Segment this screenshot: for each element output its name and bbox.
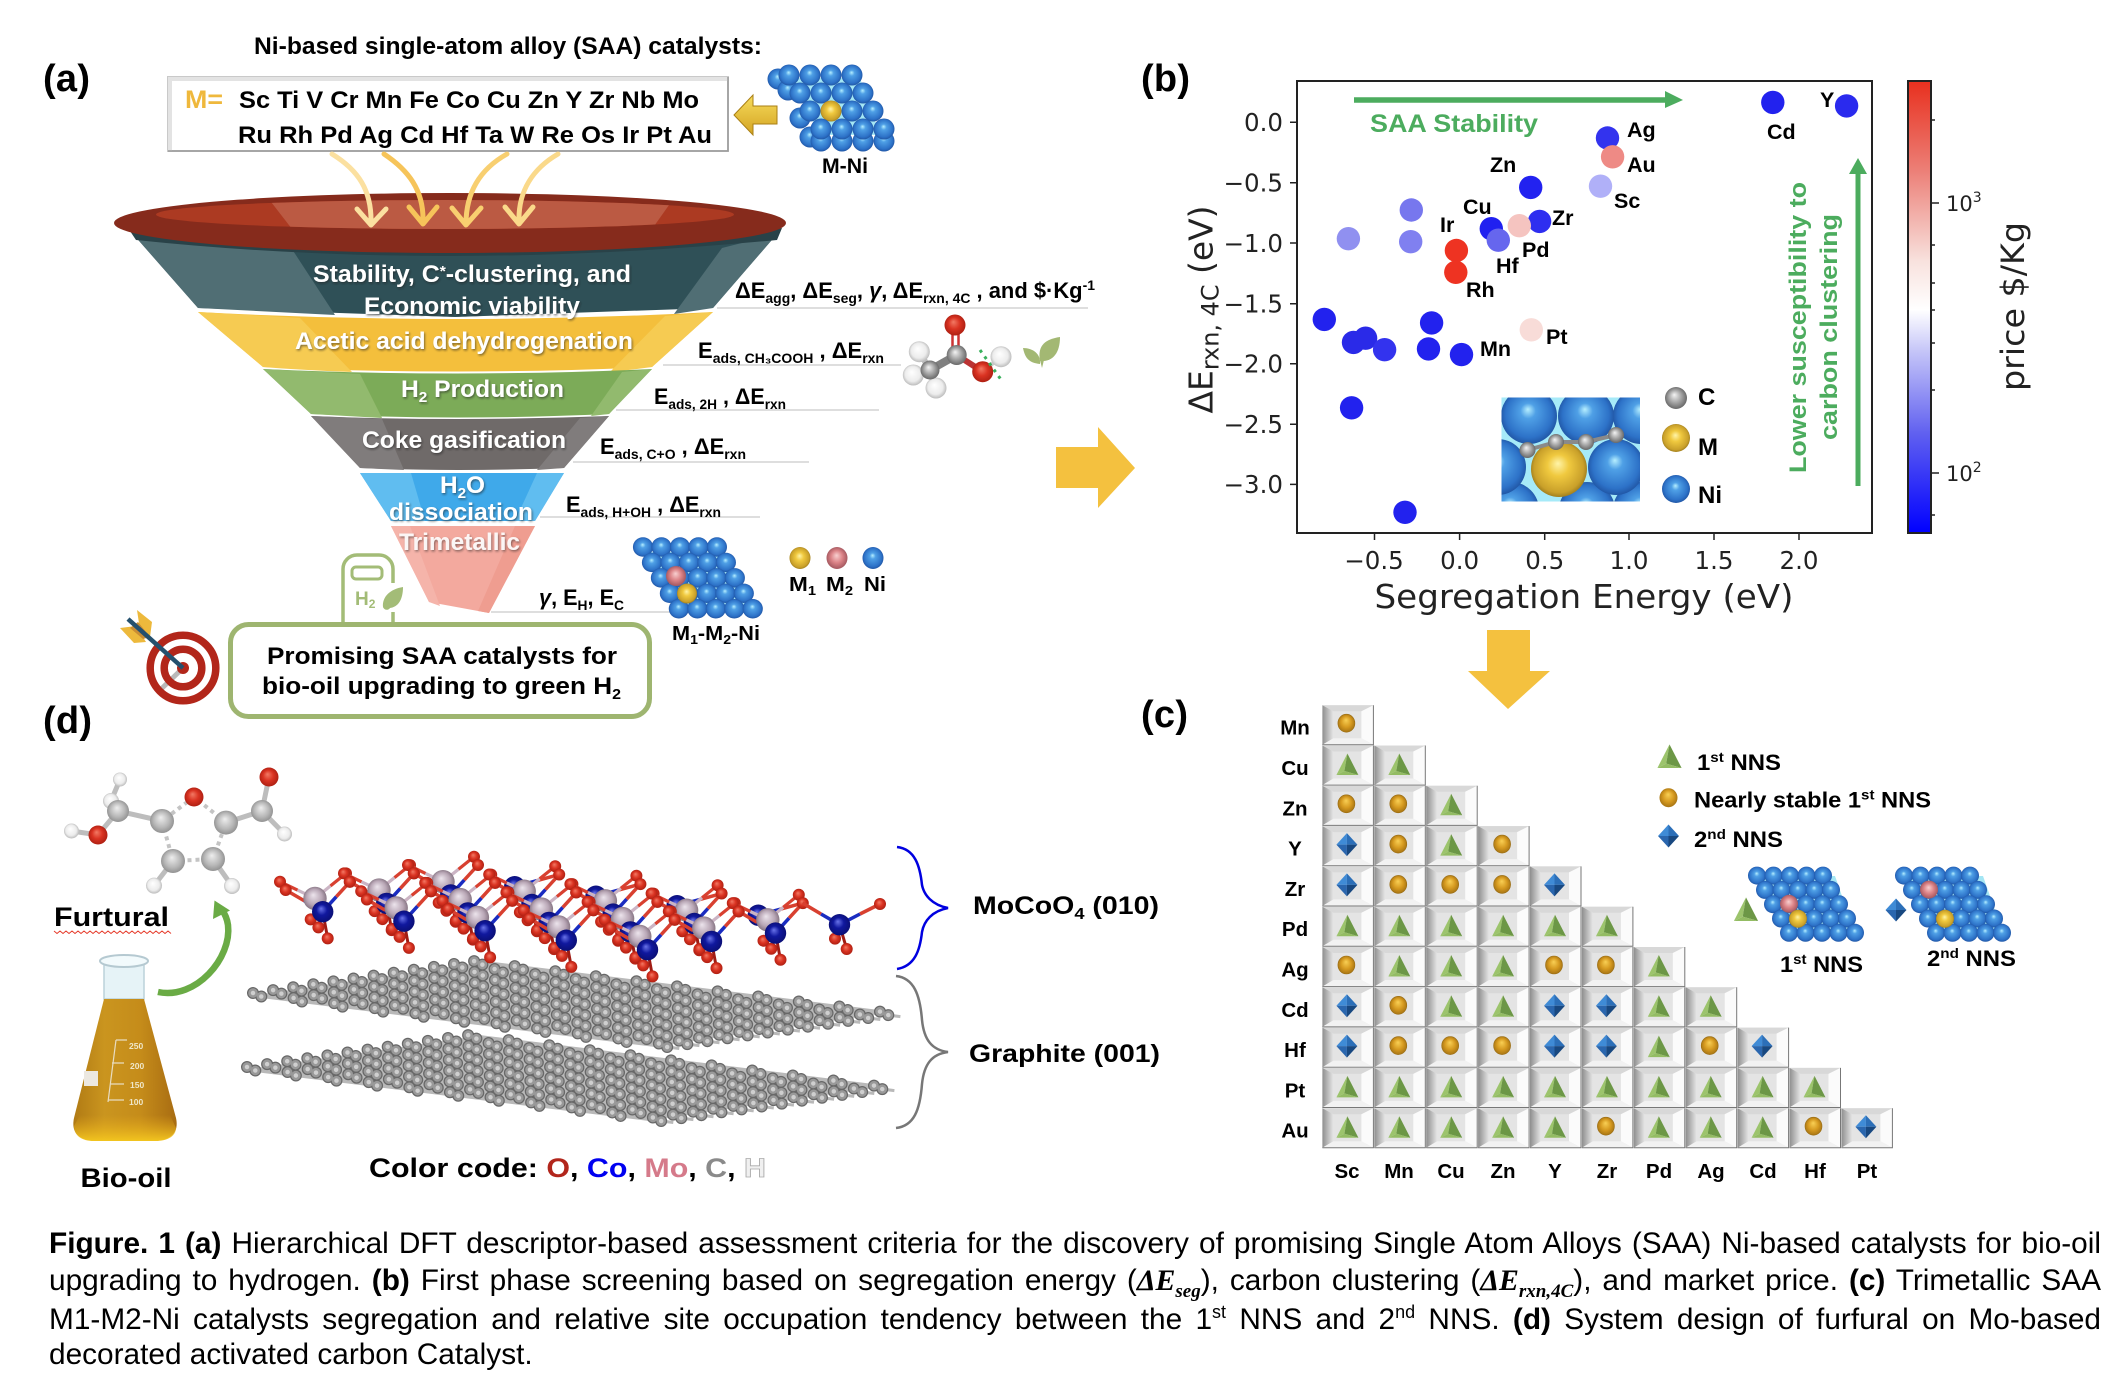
descriptors: tier 1: , ΔE: [790, 278, 833, 303]
legend: M1 M2 Ni: Ni: [864, 574, 886, 596]
scatter points: [1313, 91, 1858, 524]
inset legend: [1662, 384, 1722, 509]
descriptors: tier 5: rxn: [699, 504, 721, 520]
point labels: Zr: [1552, 206, 1574, 230]
x axis tick labels: 2.0: [1780, 546, 1818, 575]
column labels: Cd: [1749, 1160, 1777, 1183]
column labels: Zn: [1490, 1160, 1516, 1183]
label: M1-M2-Ni: -Ni: [731, 623, 760, 645]
brace: graphite: [896, 976, 948, 1128]
icon: bio-oil flask: [73, 955, 177, 1141]
arrow: lower susceptibility: [1785, 158, 1867, 486]
arrow: SAA stability: [1354, 91, 1683, 138]
descriptors: tier 4: , ΔE: [676, 434, 724, 459]
label: M1-M2-Ni: -M: [698, 623, 723, 645]
y axis tick labels: −2.0: [1224, 350, 1283, 378]
text: Figure. 1 (a) Hierarchical DFT descriptor-based assessment criteria for the discovery of promising Single Atom Alloys (SAA) Ni-based catalysts for bio-oil: [49, 1227, 2101, 1260]
example: 2nd NNS slab: 2: [1927, 946, 1939, 971]
descriptors: tier 4: ads, C+O: [615, 446, 676, 462]
label: Graphite (001): Graphite (001): [969, 1040, 1160, 1068]
legend: site types: NNS: [1726, 827, 1783, 852]
graphite sheet 1: [253, 961, 900, 1048]
funnel tier 4: coke gasification: Coke gasification: [362, 427, 566, 454]
point labels: Cd: [1767, 120, 1796, 144]
point labels: Sc: [1614, 189, 1640, 213]
arrow: SAA stability: SAA Stability: [1370, 110, 1538, 138]
descriptors: tier 1: agg: [765, 290, 790, 306]
colour bar: [1908, 81, 1982, 533]
descriptors: tier 5: , ΔE: [651, 492, 699, 517]
funnel tier 1: stability: -clustering, and: [446, 261, 631, 288]
example: 1st NNS slab: 1: [1780, 952, 1792, 977]
column labels: Sc: [1334, 1160, 1360, 1183]
colour bar: 3: [1973, 190, 1982, 206]
descriptors: tier 5: ads, H+OH: [581, 504, 651, 520]
panel a: hierarchical funnel: [114, 33, 1095, 716]
funnel tier 5: H2O dissociation: dissociation: [389, 499, 533, 526]
y axis tick labels: −2.5: [1224, 410, 1283, 439]
x axis tick labels: [1344, 546, 1818, 575]
icon: green H2 station: [343, 555, 403, 622]
label: M-Ni: M-Ni: [822, 155, 868, 178]
legend: M1 M2 Ni: 1: [808, 583, 816, 598]
callout: promising SAA catalysts: 2: [612, 686, 621, 703]
descriptors: tier 6: C: [614, 597, 624, 613]
label: M1-M2-Ni: M: [672, 623, 689, 645]
colour bar: 2: [1973, 460, 1982, 476]
inset legend: M: [1698, 434, 1718, 461]
row labels: Zn: [1282, 797, 1308, 820]
descriptors: tier 5: E: [566, 492, 581, 517]
label: M1-M2-Ni: 1: [690, 632, 698, 647]
legend: M1 M2 Ni: M: [789, 574, 806, 596]
funnel tier 1: stability: Stability, C: [313, 261, 435, 288]
row labels: Cd: [1281, 999, 1309, 1022]
point labels: Hf: [1496, 254, 1520, 278]
column labels: Pd: [1646, 1160, 1672, 1183]
text: upgrading to hydrogen. (b) First phase screening based on segregation energy (ΔEseg), carbon clustering (ΔErxn,4C), and market price. (c) Trimetallic SAA: [49, 1264, 2101, 1302]
descriptors: tier 1: [717, 277, 1095, 308]
figure caption: [49, 1227, 2101, 1371]
funnel tier 2: acetic acid: Acetic acid dehydrogenation: [295, 328, 633, 355]
descriptors: tier 5: [540, 492, 760, 520]
column labels: Mn: [1384, 1160, 1414, 1183]
example: 2nd NNS slab: NNS: [1959, 946, 2016, 971]
row labels: Cu: [1281, 757, 1309, 780]
descriptors: tier 2: ads, CH₃COOH: [713, 350, 813, 366]
descriptors: tier 2: [663, 338, 901, 366]
funnel tier 3: H2 production: H: [401, 376, 418, 403]
icon: acetic acid molecule: [903, 314, 1012, 398]
descriptors: tier 3: ads, 2H: [668, 396, 717, 412]
row labels: Hf: [1284, 1039, 1306, 1062]
icon: bio-oil flask: 200: [130, 1061, 144, 1071]
point labels: Cu: [1463, 195, 1492, 219]
row labels: Zr: [1285, 878, 1305, 901]
label: MoCoO4 (010): 4: [1074, 906, 1085, 923]
icon: bio-oil flask: 150: [130, 1080, 144, 1090]
legend: M1 M2 Ni: M: [826, 574, 843, 596]
legend: M1 M2 Ni: [789, 547, 886, 598]
column labels: Hf: [1804, 1160, 1826, 1183]
descriptors: tier 4: E: [600, 434, 615, 459]
inset legend: C: [1698, 384, 1715, 411]
icon: left arrow from M-Ni: [734, 95, 777, 135]
metal list box: Sc Ti V Cr Mn Fe Co Cu Zn Y Zr Nb Mo: [239, 87, 699, 114]
point labels: Zn: [1490, 153, 1516, 177]
callout: promising SAA catalysts: [230, 624, 650, 716]
colour bar: 10: [1946, 192, 1973, 216]
metal list box: Ru Rh Pd Ag Cd Hf Ta W Re Os Ir Pt Au: [238, 122, 712, 149]
panel label (c): (c): [1141, 694, 1188, 736]
panel label (b): (b): [1141, 58, 1190, 100]
row labels: Pd: [1282, 918, 1308, 941]
x axis title: Segregation Energy (eV): [1374, 577, 1794, 616]
graphite sheet 2: [247, 1035, 894, 1122]
funnel tier 3: H2 production: Production: [427, 376, 564, 403]
panel label (a): (a): [43, 58, 90, 100]
funnel tier 6: trimetallic: Trimetallic: [399, 529, 520, 556]
icon: bio-oil flask: 250: [129, 1041, 143, 1051]
descriptors: tier 4: rxn: [724, 446, 746, 462]
panel d: system design: [54, 768, 1160, 1193]
heading: SAA catalysts: Ni-based single-atom alloy (SAA) catalysts:: [254, 33, 762, 60]
legend: site types: st: [1710, 749, 1724, 765]
descriptors: tier 3: E: [654, 384, 669, 409]
icon: green H2 station: 2: [369, 597, 376, 611]
label: MoCoO4 (010): (010): [1085, 892, 1159, 920]
legend: site types: nd: [1707, 826, 1726, 842]
y axis title: (eV): [1182, 206, 1220, 284]
inset legend: Ni: [1698, 482, 1722, 509]
panel b: scatter chart: [1182, 81, 2032, 616]
arrow: bio-oil to furfural: [158, 900, 230, 993]
x axis tick labels: −0.5: [1344, 546, 1404, 575]
descriptors: tier 1: γ, ΔE: [869, 278, 923, 303]
x axis tick labels: 0.0: [1440, 546, 1479, 575]
row labels: Ag: [1281, 958, 1309, 982]
icon: bio-oil flask: 100: [129, 1097, 143, 1107]
arrow: a to b: [1056, 427, 1135, 508]
legend: site types: [1657, 744, 1931, 852]
row labels: Y: [1288, 838, 1302, 861]
funnel tier 4: coke gasification: [311, 416, 609, 470]
example: 2nd NNS slab: nd: [1940, 945, 1959, 961]
descriptors: tier 6: , E: [588, 585, 614, 610]
label: Bio-oil: Bio-oil: [80, 1163, 172, 1193]
icon: M-Ni slab: [768, 64, 894, 152]
funnel tier 5: H2O dissociation: [360, 472, 564, 526]
column labels: [1334, 1160, 1877, 1183]
brace: MoCoO4: [897, 847, 948, 969]
point labels: [1440, 88, 1834, 361]
descriptors: tier 2: E: [698, 338, 713, 363]
chart axes: [1290, 81, 1872, 540]
MoCoO4 slab: [274, 851, 886, 982]
funnel tier 6: trimetallic: [391, 526, 535, 613]
point labels: Rh: [1466, 278, 1495, 302]
text: M1-M2-Ni catalysts segregation and relative site occupation tendency between the 1st NNS and 2nd NNS. (d) System design of furfural on Mo-based: [49, 1302, 2101, 1336]
column labels: Y: [1548, 1160, 1562, 1183]
x axis tick labels: 0.5: [1525, 546, 1564, 575]
example: 2nd NNS slab: [1886, 867, 2016, 971]
inset: C chain on M-Ni surface: [1502, 398, 1640, 502]
funnel tier 3: H2 production: [263, 369, 652, 418]
point labels: Mn: [1480, 337, 1511, 361]
legend: site types: st: [1861, 787, 1875, 803]
point labels: Au: [1627, 153, 1656, 177]
callout: promising SAA catalysts: bio-oil upgrading to green H: [262, 673, 590, 700]
legend: site types: 2: [1694, 827, 1706, 852]
legend: site types: NNS: [1724, 750, 1781, 775]
x axis tick labels: 1.5: [1695, 546, 1733, 575]
y axis tick labels: −1.5: [1224, 290, 1283, 318]
legend: site types: NNS: [1874, 788, 1931, 813]
funnel rim: [114, 193, 786, 253]
descriptors: tier 6: γ, E: [539, 585, 578, 610]
column labels: Cu: [1437, 1160, 1465, 1183]
descriptors: tier 1: ,: [857, 278, 869, 303]
descriptors: tier 1: ΔE: [735, 278, 766, 303]
colour bar title: price $/Kg: [1994, 222, 2032, 391]
label: M1-M2-Ni: 2: [723, 632, 731, 647]
legend: site types: Nearly stable 1: [1694, 788, 1849, 813]
arrows feeding funnel: [332, 154, 558, 225]
y axis tick labels: −1.0: [1224, 229, 1283, 258]
label: MoCoO4 (010): MoCoO: [973, 892, 1062, 920]
example: 1st NNS slab: st: [1793, 951, 1807, 967]
icon: leaf: [1023, 337, 1060, 368]
label: Furtural with squiggle: Furtural: [54, 902, 169, 932]
point labels: Ir: [1440, 213, 1455, 237]
legend: colour code: Color code: O, Co, Mo, C, H: [369, 1153, 766, 1183]
funnel tier 5: H2O dissociation: O: [466, 472, 485, 499]
arrow: lower susceptibility: Lower susceptibility to: [1785, 182, 1812, 473]
point labels: Ag: [1627, 118, 1656, 142]
row labels: [1280, 717, 1310, 1143]
funnel tier 2: acetic acid: [198, 312, 713, 372]
callout: promising SAA catalysts: Promising SAA catalysts for: [267, 643, 617, 670]
matrix cells: [1322, 705, 1892, 1148]
descriptors: tier 6: H: [578, 597, 588, 613]
descriptors: tier 1: rxn, 4C: [923, 290, 970, 306]
panel label (d): (d): [43, 700, 92, 742]
metal list box: [168, 77, 728, 151]
column labels: Ag: [1697, 1160, 1725, 1183]
descriptors: tier 6: [491, 585, 670, 613]
icon: trimetallic slab: [633, 537, 763, 618]
point labels: Pd: [1522, 238, 1549, 262]
funnel tier 5: H2O dissociation: H: [440, 472, 457, 499]
column labels: Pt: [1857, 1160, 1877, 1183]
descriptors: tier 4: [573, 434, 809, 462]
row labels: Mn: [1280, 717, 1310, 740]
funnel tier 1: stability: *: [440, 263, 446, 280]
y axis tick labels: [1224, 108, 1283, 499]
panel c: occupation matrix: [1280, 705, 2016, 1183]
example: 1st NNS slab: [1734, 867, 1864, 977]
point labels: Y: [1820, 88, 1834, 112]
colour bar: 10: [1946, 462, 1973, 486]
icon: green H2 station: H: [355, 589, 369, 610]
icon: target with arrow: [120, 610, 216, 701]
descriptors: tier 2: rxn: [862, 350, 884, 366]
descriptors: tier 3: [616, 384, 879, 412]
y axis title: ΔE: [1182, 370, 1220, 414]
column labels: Zr: [1597, 1160, 1617, 1183]
point labels: Pt: [1546, 325, 1568, 349]
x axis tick labels: 1.0: [1610, 546, 1648, 575]
legend: M1 M2 Ni: 2: [845, 583, 853, 598]
funnel tier 1: stability: Economic viability: [364, 293, 581, 320]
funnel tier 1: stability: [128, 228, 782, 320]
descriptors: tier 1: seg: [833, 290, 857, 306]
row labels: Au: [1281, 1120, 1309, 1143]
y axis title: rxn, 4C: [1196, 284, 1224, 370]
descriptors: tier 1: -1: [1083, 277, 1095, 293]
y axis tick labels: 0.0: [1244, 108, 1283, 137]
text: decorated activated carbon Catalyst.: [49, 1338, 533, 1371]
arrow: lower susceptibility: carbon clustering: [1816, 214, 1843, 440]
example: 1st NNS slab: NNS: [1807, 952, 1863, 977]
y axis tick labels: −3.0: [1224, 470, 1283, 499]
descriptors: tier 3: rxn: [765, 396, 786, 412]
y axis tick labels: −0.5: [1224, 168, 1283, 198]
descriptors: tier 2: , ΔE: [813, 338, 862, 363]
icon: furfural molecule: [64, 768, 292, 894]
row labels: Pt: [1285, 1079, 1305, 1102]
legend: site types: 1: [1697, 750, 1709, 775]
arrow: b to c: [1468, 630, 1550, 709]
funnel tier 3: H2 production: 2: [419, 389, 427, 406]
descriptors: tier 1: , and $·Kg: [970, 278, 1083, 303]
funnel tier 5: H2O dissociation: 2: [458, 485, 466, 502]
metal list box: M=: [185, 86, 223, 114]
descriptors: tier 3: , ΔE: [717, 384, 765, 409]
